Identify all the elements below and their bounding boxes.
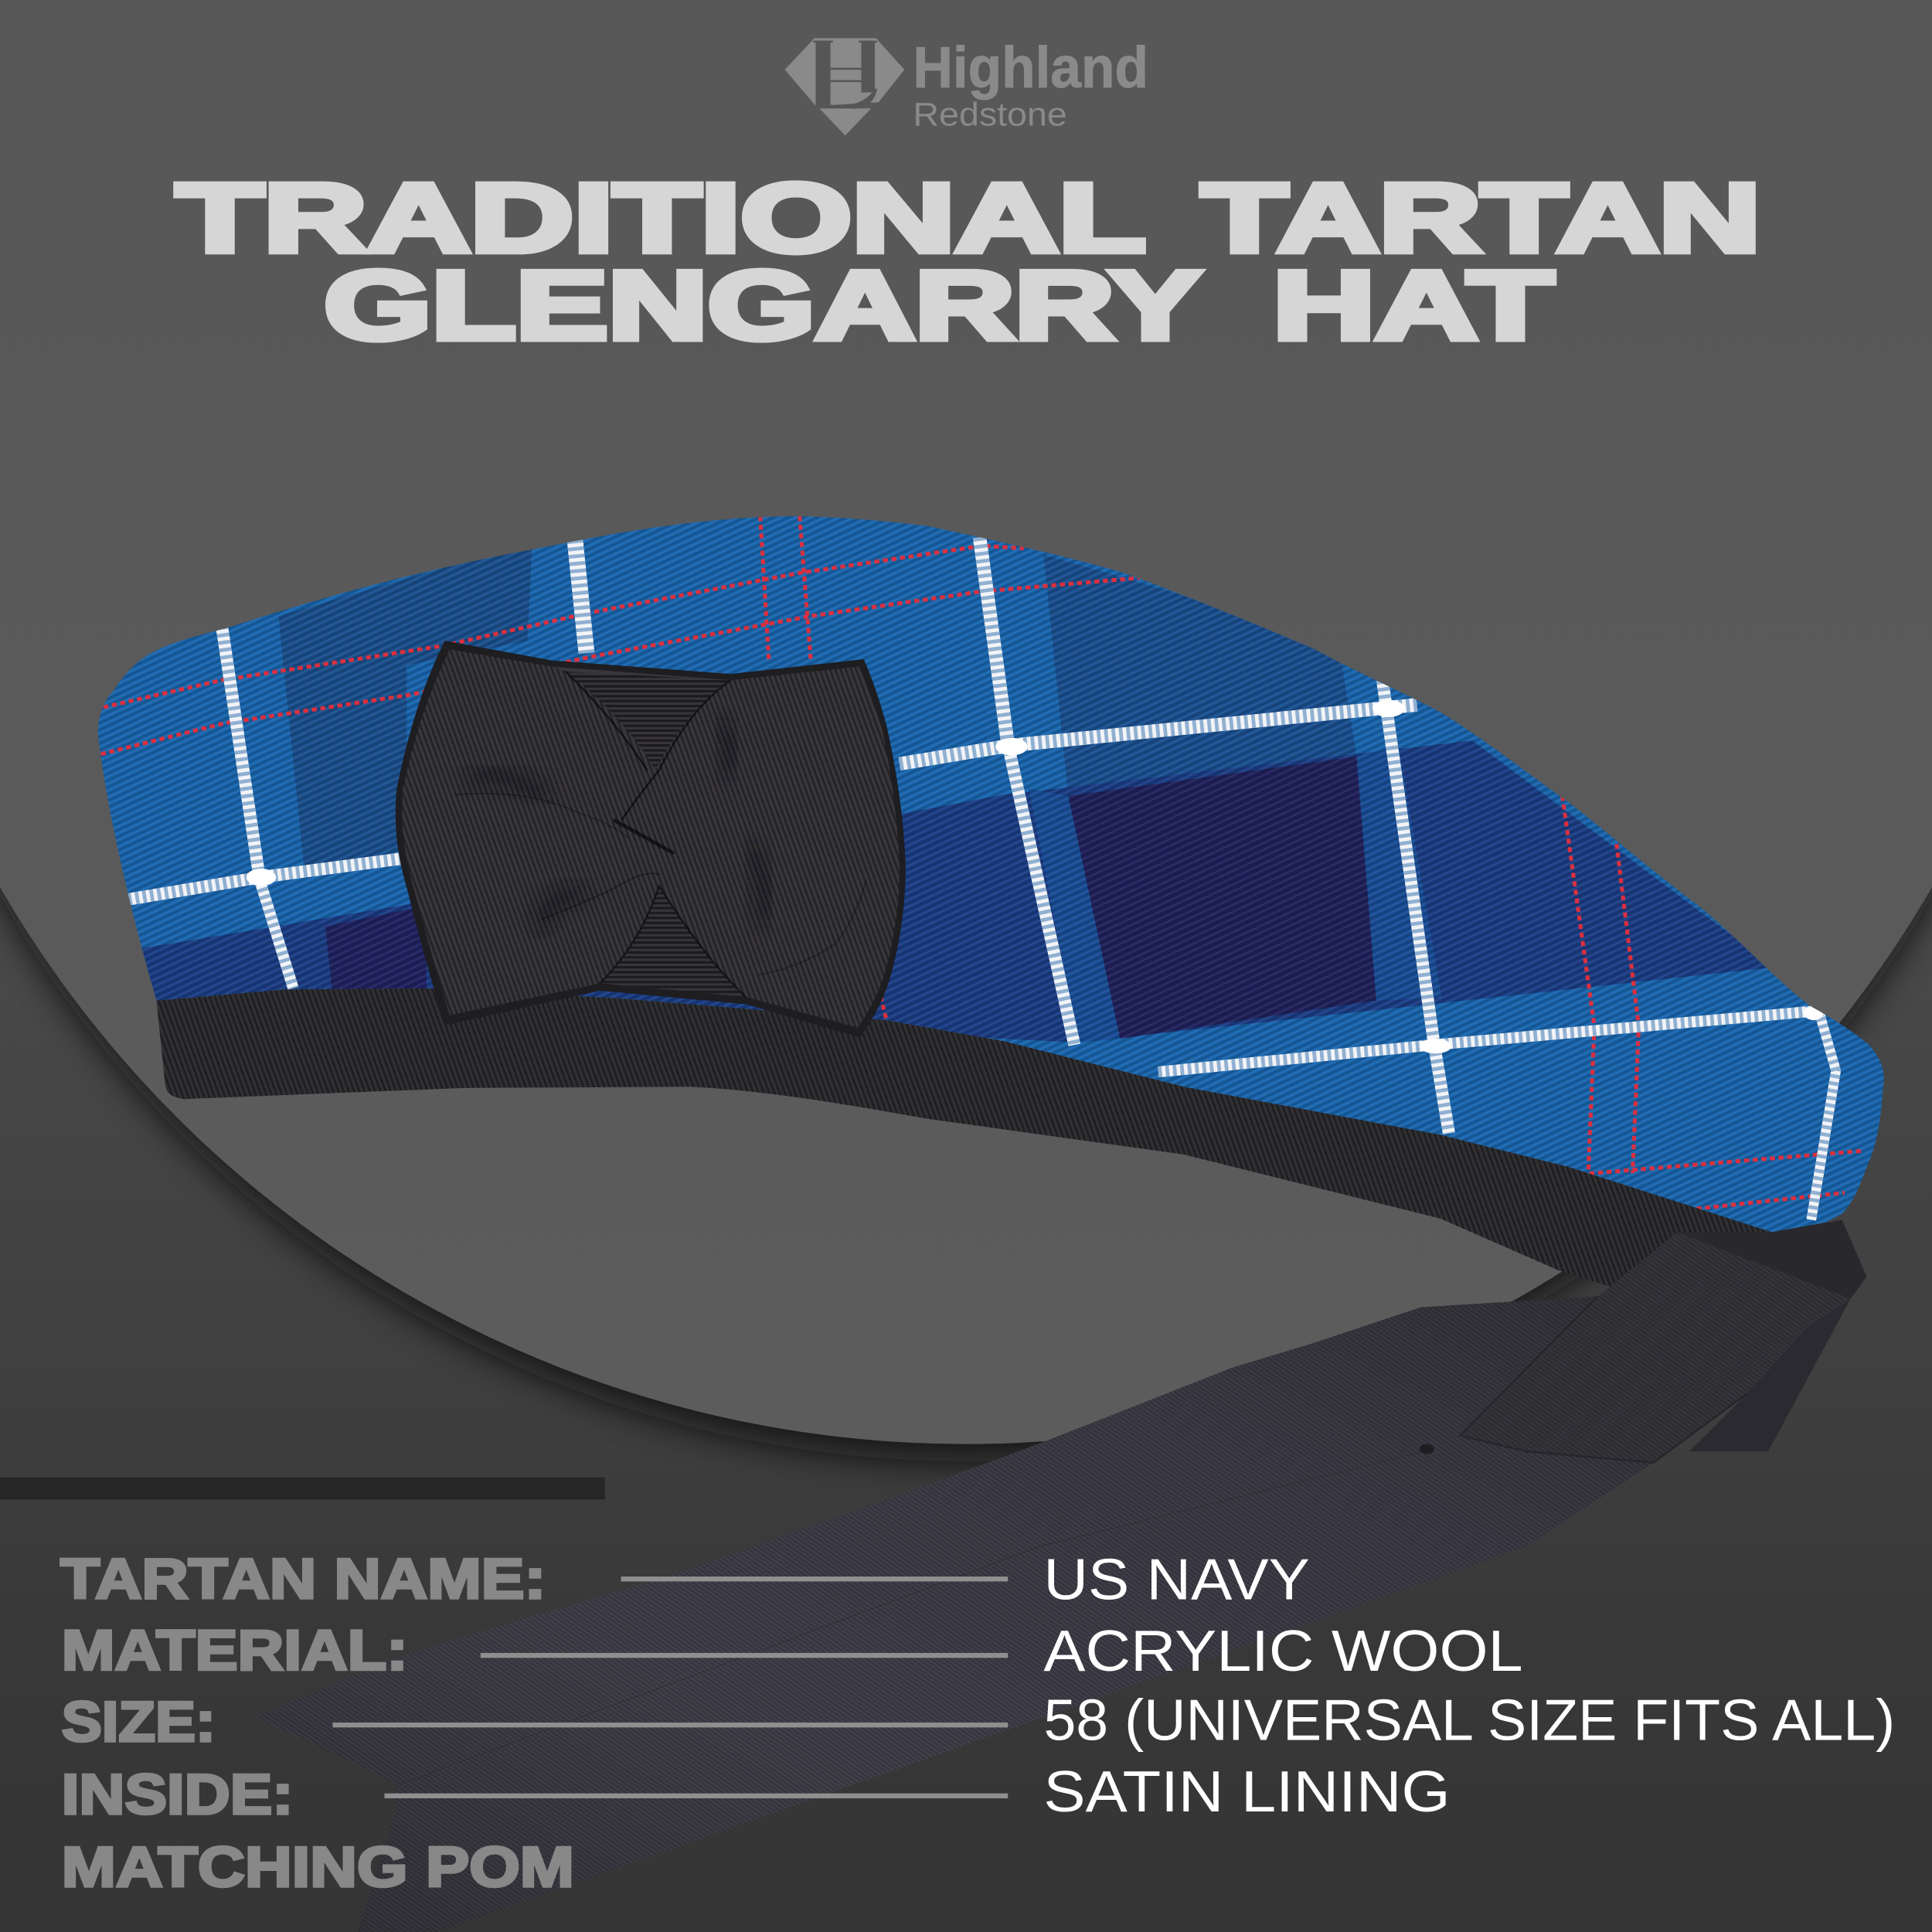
bow gathered centre: top xyxy=(566,672,730,770)
navy horizontal band xyxy=(139,740,1774,1043)
spec labels: MATCHING POM xyxy=(62,1835,574,1899)
title: GLENGARRY xyxy=(324,250,1202,359)
dark accent bar xyxy=(0,1478,605,1499)
large background circle xyxy=(0,0,1932,1444)
spec labels: INSIDE: xyxy=(62,1763,293,1826)
circle shadow xyxy=(0,0,1932,1461)
spec labels xyxy=(60,1547,574,1899)
title: TRADITIONAL xyxy=(176,163,1146,272)
spec values: US NAVY xyxy=(1043,1547,1310,1612)
plaid base xyxy=(74,493,1922,1257)
bow body xyxy=(402,649,900,1028)
knot folded panel xyxy=(1460,1232,1851,1463)
spec values: 58 (UNIVERSAL SIZE FITS ALL) xyxy=(1043,1687,1895,1752)
bow folds xyxy=(454,672,866,997)
red threads xyxy=(101,516,1863,1209)
white stripe weave xyxy=(128,532,1836,1219)
bow gathered centre: bottom xyxy=(600,886,746,997)
ribbon crease xyxy=(394,1451,1428,1787)
logo icon: diamond monogram xyxy=(785,38,904,135)
knot top strip xyxy=(1677,1219,1866,1298)
spec labels: MATERIAL: xyxy=(62,1618,408,1682)
bow xyxy=(396,641,906,1037)
title: TARTAN xyxy=(1202,163,1760,272)
title xyxy=(176,163,1760,359)
twill texture xyxy=(74,493,1922,1257)
title: HAT xyxy=(1273,250,1554,359)
hat band xyxy=(156,988,1772,1306)
ribbon back piece xyxy=(1689,1298,1851,1451)
logo wordmark: Highland xyxy=(913,35,1148,100)
bow ribbed texture xyxy=(402,649,900,1028)
thread crossings xyxy=(247,700,1824,1053)
spec labels: TARTAN NAME: xyxy=(60,1547,546,1611)
ribbon knot shadow xyxy=(1420,1444,1434,1454)
spec labels: SIZE: xyxy=(62,1690,216,1753)
logo sub-wordmark: Redstone xyxy=(913,97,1067,134)
white threads xyxy=(128,532,1836,1219)
ribbon tail xyxy=(255,1296,1654,1932)
medium blue verticals through navy xyxy=(1029,788,1120,1043)
spec values: SATIN LINING xyxy=(1043,1759,1451,1824)
dark navy squares xyxy=(1068,757,1376,1039)
logo: Highland Redstone xyxy=(785,35,1148,135)
bow outer edge xyxy=(396,641,906,1037)
ribbon knot xyxy=(1460,1219,1866,1463)
spec values xyxy=(1043,1547,1895,1824)
hat crown: tartan plaid xyxy=(74,493,1922,1257)
darker vertical bands xyxy=(278,543,532,870)
connector lines xyxy=(332,1577,1008,1798)
spec values: ACRYLIC WOOL xyxy=(1043,1618,1523,1683)
